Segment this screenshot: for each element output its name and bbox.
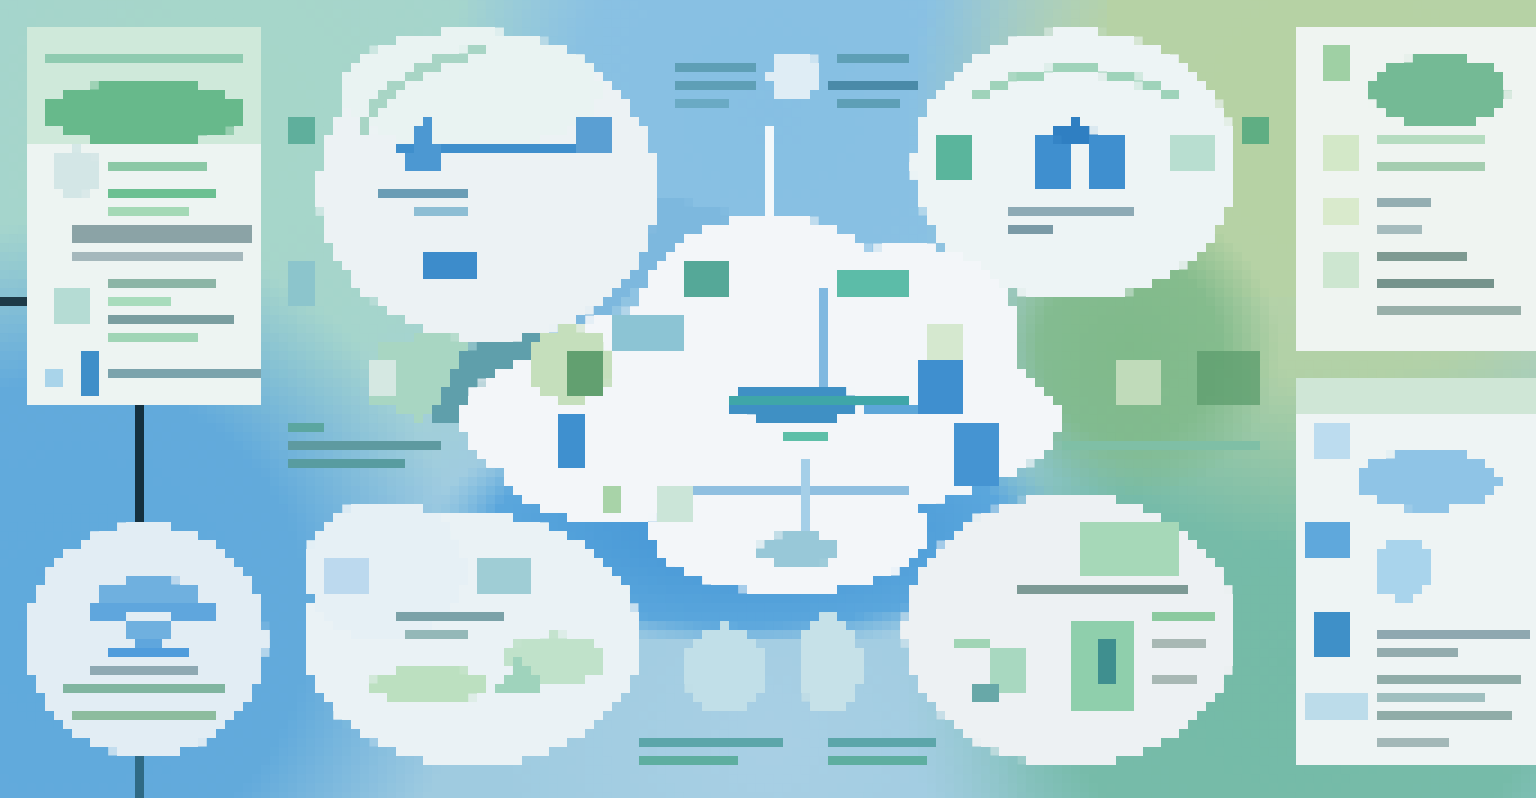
panel: top-left card bbox=[30, 30, 265, 402]
connectors bbox=[690, 290, 940, 535]
icon: blue cloud bbox=[1356, 450, 1500, 510]
panel: top-right cloud bbox=[913, 30, 1237, 300]
icon: globe bbox=[1373, 540, 1433, 600]
labels bbox=[955, 611, 1212, 698]
blue shadow beneath cloud bbox=[400, 400, 1120, 640]
icon: blue left device bbox=[554, 412, 588, 470]
icon: blue cloud bbox=[86, 578, 216, 655]
panel: top-right card bbox=[1297, 30, 1536, 350]
heading: top-left card bbox=[42, 53, 247, 65]
list item 1 bbox=[52, 148, 214, 212]
panel: bottom-right cloud bbox=[904, 494, 1236, 766]
icon: tile bbox=[1306, 690, 1366, 724]
panel: bottom centre icons bbox=[640, 615, 933, 766]
icon: green light bbox=[925, 328, 961, 360]
icon: device bbox=[1314, 612, 1346, 654]
icon: house bbox=[325, 560, 373, 598]
icon: drop bbox=[1318, 422, 1350, 456]
icon: teal banner bbox=[835, 273, 905, 301]
panel: floating icons left bbox=[292, 115, 400, 400]
list bbox=[1320, 133, 1520, 315]
pale green patch left of cloud bbox=[370, 325, 470, 420]
caption bbox=[1005, 210, 1135, 238]
caption bbox=[375, 185, 472, 213]
caption bbox=[60, 664, 222, 717]
text lines bbox=[1373, 628, 1528, 750]
icon: green right bbox=[1170, 135, 1212, 171]
teal shadow wedge bbox=[430, 322, 545, 420]
icon: tree block bbox=[1078, 520, 1178, 572]
diagram: blue connector bbox=[400, 112, 615, 170]
icon: bottom cylinder bbox=[758, 533, 838, 567]
panel: central cloud bbox=[460, 215, 1060, 593]
icon: green folder bbox=[527, 327, 613, 403]
heading bbox=[1015, 585, 1185, 594]
icon: frame bbox=[478, 562, 528, 594]
list item 3 bbox=[52, 281, 238, 342]
caption bbox=[392, 611, 504, 640]
panel: bottom centre-left cloud bbox=[304, 500, 640, 766]
panel: bottom-left circle bbox=[26, 524, 266, 756]
panel: top-centre icon and labels bbox=[676, 50, 914, 218]
arc bbox=[360, 50, 490, 130]
blue channel bbox=[535, 195, 740, 380]
list item 2 bbox=[76, 228, 256, 257]
panel: bottom-right card bbox=[1297, 378, 1536, 765]
icon: blue right bbox=[922, 360, 964, 410]
icon: green globe bbox=[1368, 55, 1508, 127]
list item 4 bbox=[42, 352, 262, 392]
icon: green small bbox=[605, 482, 692, 522]
panel: right-side green blocks bbox=[1065, 118, 1271, 453]
icon: green square bbox=[682, 262, 726, 300]
panel: top centre-left cloud bbox=[318, 30, 658, 340]
icon: green badge bbox=[1322, 45, 1348, 81]
connector lines left bbox=[0, 299, 146, 798]
icon: blue box bbox=[426, 248, 477, 282]
panel: left-middle text bbox=[292, 419, 442, 470]
icon: blue server bbox=[956, 425, 998, 483]
icon: green door bbox=[1075, 625, 1137, 710]
landscape bbox=[370, 634, 605, 703]
central hub bbox=[725, 383, 905, 437]
icon: green left bbox=[940, 135, 972, 177]
icon: buildings bbox=[1033, 117, 1126, 193]
icon: blue square bbox=[1306, 525, 1346, 559]
green banner bbox=[43, 81, 247, 145]
icon: teal card bbox=[614, 315, 682, 351]
